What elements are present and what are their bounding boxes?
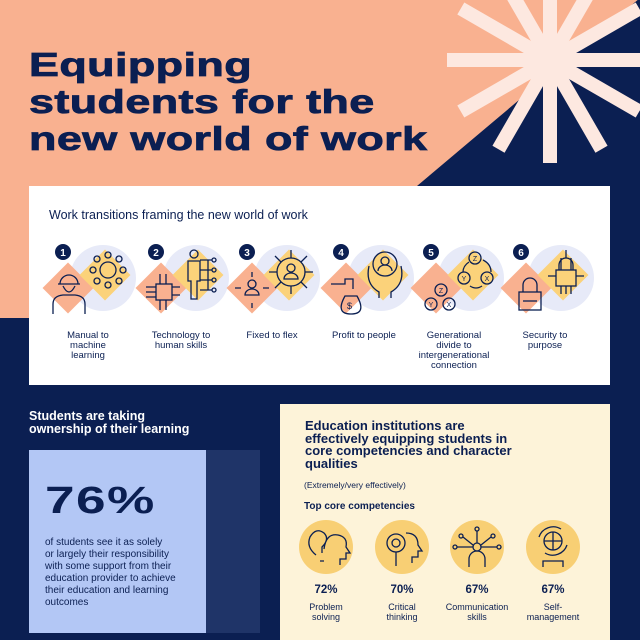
heading: core competencies and character — [305, 443, 512, 458]
icon 5: generational divide: Z — [439, 288, 444, 295]
panel: work transitions: intergenerational — [419, 350, 489, 361]
heading: qualities — [305, 456, 358, 471]
panel: core competencies — [280, 404, 610, 640]
icon 3: fixed to flex — [227, 244, 320, 313]
stat description: outcomes — [45, 597, 88, 608]
icon: problem solving — [299, 520, 353, 574]
panel: work transitions: connection — [431, 360, 477, 371]
competency icons — [299, 520, 580, 574]
heading: Education institutions are — [305, 418, 465, 433]
panel: core competencies: Problem — [309, 602, 343, 612]
heading: effectively equipping students in — [305, 431, 507, 446]
icon 5: generational divide: X — [447, 302, 452, 309]
icon 5: generational divide: X — [485, 276, 490, 283]
icons row — [42, 244, 594, 315]
panel: core competencies: 72% — [314, 584, 338, 596]
big stat: 76% — [45, 480, 156, 522]
panel heading: Work transitions framing the new world of work — [49, 208, 308, 222]
panel: work transitions: Technology to — [152, 330, 210, 341]
title — [29, 46, 428, 157]
stat description — [45, 537, 176, 608]
competency stats — [309, 584, 580, 622]
panel: core competencies: solving — [312, 612, 340, 622]
panel: work transitions: human skills — [155, 340, 207, 351]
panel: core competencies: 67% — [541, 584, 565, 596]
stat box — [29, 450, 260, 633]
icon 5: generational divide: Z — [473, 256, 478, 263]
panel: students ownership — [29, 409, 260, 633]
subtext: (Extremely/very effectively) — [304, 480, 406, 490]
icon 4: profit to people: 4 — [338, 248, 344, 259]
panel: core competencies: Communication — [446, 602, 508, 612]
heading: Students are taking — [29, 409, 145, 423]
icon 4: profit to people: $ — [347, 301, 352, 311]
icon: communication skills — [450, 520, 504, 574]
icon 5: generational divide: Y — [462, 276, 467, 283]
heading: ownership of their learning — [29, 422, 189, 436]
title: Equipping — [29, 46, 252, 83]
panel: work transitions: Security to — [523, 330, 567, 341]
icon labels — [67, 330, 567, 371]
title: new world of work — [29, 120, 427, 157]
stat description: of students see it as solely — [45, 537, 162, 548]
icon: self-management — [526, 520, 580, 574]
icon 5: generational divide: 5 — [428, 248, 434, 259]
panel: work transitions: Profit to people — [332, 330, 396, 341]
stat description: education provider to achieve — [45, 573, 176, 584]
panel: core competencies: management — [527, 612, 579, 622]
panel: core competencies: thinking — [386, 612, 418, 622]
panel: work transitions: Fixed to flex — [246, 330, 298, 341]
icon: starburst — [447, 0, 640, 163]
heading — [29, 409, 189, 436]
icon 3: fixed to flex: 3 — [244, 248, 250, 259]
panel: work transitions: purpose — [528, 340, 562, 351]
panel: core competencies: 67% — [465, 584, 489, 596]
icon 6: security to purpose — [501, 244, 594, 313]
title: students for the — [29, 83, 375, 120]
stat description: with some support from their — [45, 561, 171, 572]
icon 4: profit to people — [321, 244, 414, 314]
icon 5: generational divide — [411, 244, 504, 313]
panel: work transitions — [29, 186, 610, 385]
stat description: or largely their responsibility — [45, 549, 169, 560]
panel: work transitions: Manual to — [67, 330, 109, 341]
icon 2: technology to human skills — [136, 244, 229, 313]
icon: critical thinking — [375, 520, 429, 574]
icon 1: manual to machine learning: 1 — [60, 248, 66, 259]
heading — [305, 418, 512, 471]
subheading: Top core competencies — [304, 501, 415, 512]
panel: work transitions: Generational — [427, 330, 481, 341]
icon 2: technology to human skills: 2 — [153, 248, 159, 259]
panel: core competencies: Critical — [388, 602, 416, 612]
panel: core competencies: Self- — [544, 602, 562, 612]
panel: work transitions: learning — [71, 350, 105, 361]
icon 5: generational divide: Y — [429, 302, 434, 309]
panel: work transitions: machine — [70, 340, 106, 351]
panel: core competencies: skills — [467, 612, 487, 622]
stat description: their education and learning — [45, 585, 168, 596]
icon 6: security to purpose: 6 — [518, 248, 524, 259]
panel: core competencies: 70% — [390, 584, 414, 596]
panel: work transitions: divide to — [436, 340, 472, 351]
icon 1: manual to machine learning — [43, 244, 136, 314]
